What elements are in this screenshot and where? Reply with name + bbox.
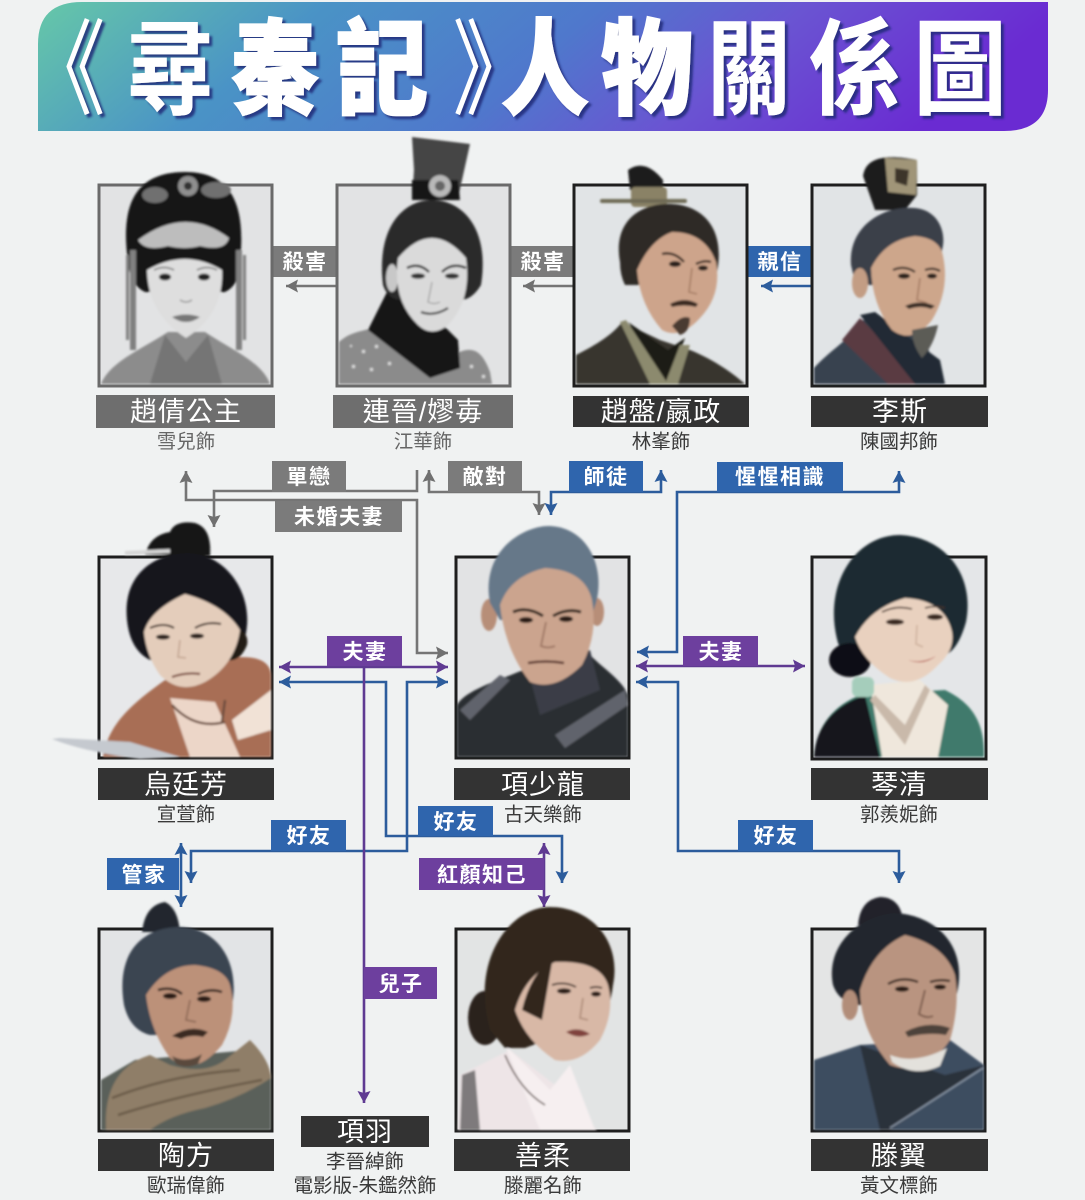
label: 師徒: 師徒 [584,466,628,489]
title text: 圖 [913,11,1007,128]
name bar: 陶方 [158,1141,214,1171]
portrait: 李斯 [814,157,945,384]
label: 紅顏知己: 紅顏知己 [437,864,527,887]
photo frame [456,929,629,1131]
name bar [573,396,749,427]
label: 好友 center: 好友 [434,811,478,834]
actor: 陳國邦飾 [860,431,938,453]
label: 惺惺相識: 惺惺相識 [735,466,825,489]
name bar: 琴清 [871,770,927,800]
portrait: 烏廷芳 [52,522,271,759]
title text: 《 [22,12,106,128]
name bar [333,395,513,428]
label: 好友 left: 好友 [286,825,332,848]
character: 項少龍 [454,526,630,826]
connector: 兒子 [363,666,365,1103]
photo frame [812,929,985,1131]
label: 夫妻 left: 夫妻 [342,641,388,664]
title text: 尋 [127,13,213,129]
actor: 雪兒飾 [157,431,215,453]
connector: 殺害 arrow to 連晉 [523,285,574,287]
connector: 好友 陶方 [191,682,448,883]
portrait: 滕翼 [814,897,985,1130]
photo frame [574,185,747,386]
name bar: 趙盤/嬴政 [601,397,721,427]
name bar [811,396,988,427]
name bar [98,768,274,800]
portrait: 連晉 [339,137,492,384]
name bar [301,1116,429,1147]
title banner [22,2,1048,131]
actor: 郭羨妮飾 [860,804,938,826]
title text: 》 [452,12,536,128]
name bar [454,768,630,800]
character: 趙倩公主 [96,172,275,453]
actor: 滕麗名飾 [504,1175,582,1197]
label: 好友 center [418,806,493,836]
label: 兒子 [364,967,437,999]
label: 好友 right: 好友 [754,825,798,848]
name bar [811,1139,988,1171]
connector: 未婚夫妻 [186,471,448,653]
connector: 紅顏知己 [543,843,545,907]
connector: 師徒 [551,470,661,515]
photo frame [812,185,985,386]
label: 好友 right [738,820,813,851]
label: 敵對: 敵對 [462,465,508,489]
label: 管家 [107,858,179,890]
title text: 係 [809,12,901,128]
label: 單戀 [272,461,346,492]
label: 敵對 [448,461,522,492]
connector: 好友 善柔 [279,682,562,883]
actor: 宣萱飾 [157,804,215,826]
connector: 殺害 arrow to 趙倩公主 [286,285,337,287]
connector: 好友 滕翼 [636,682,899,883]
name bar [454,1139,630,1171]
character: 陶方 [98,902,274,1197]
label: 管家: 管家 [122,863,166,887]
label: 殺害 right: 殺害 [520,250,566,274]
portrait: 琴清 [814,535,984,757]
label: 惺惺相識 [717,462,843,492]
title text [22,11,1007,129]
name bar [96,395,275,428]
label: 殺害 left: 殺害 [282,250,328,274]
name bar: 連晉/嫪毐 [363,397,483,427]
label: 未婚夫妻: 未婚夫妻 [294,506,384,529]
actor: 李晉綽飾 [326,1151,404,1173]
portrait: 趙倩公主 [101,172,270,384]
connector: 夫妻 right [636,665,805,667]
character: 烏廷芳 [52,522,274,826]
connector: 惺惺相識 [637,471,899,652]
name bar [811,768,988,800]
character: 滕翼 [811,897,988,1197]
actor: 古天樂飾 [504,804,582,826]
name bar: 項羽 [337,1117,393,1147]
title text: 記 [336,12,428,128]
connector: 管家 [180,843,182,907]
portrait: 趙盤 [576,166,745,384]
portrait: 善柔 [458,907,615,1130]
label: 親信 [748,246,812,277]
actor: 江華飾 [394,431,452,453]
connector: 夫妻 left [279,666,448,668]
character: 趙盤/嬴政 [573,166,749,453]
character: 項羽 [294,1116,436,1197]
actor: 歐瑞偉飾 [147,1175,225,1197]
label: 兒子: 兒子 [378,973,424,996]
label: 殺害 left [273,246,337,277]
title text: 關 [707,12,791,128]
title text: 秦 [231,13,319,129]
connector: 親信 arrow to 趙盤 [761,285,812,287]
label: 夫妻 right [683,636,758,666]
connector: 敵對 [429,470,539,515]
label: 師徒 [569,461,643,492]
name bar [98,1139,274,1171]
connector: 單戀 [214,470,417,527]
film actor: 電影版-朱鑑然飾 [294,1175,436,1197]
label: 紅顏知己 [419,858,544,890]
photo frame [456,557,629,758]
label: 夫妻 right: 夫妻 [698,641,744,664]
name bar: 趙倩公主 [130,397,242,427]
photo frame [337,185,510,386]
photo frame [812,557,986,759]
label: 親信: 親信 [758,251,802,274]
label: 好友 left [271,820,346,851]
portrait: 項少龍 [457,526,628,757]
label: 夫妻 left [327,636,402,666]
name bar: 善柔 [515,1141,571,1171]
character: 琴清 [811,535,988,826]
actor: 林峯飾 [632,431,690,453]
label: 殺害 right [511,246,574,277]
title text: 物 [601,12,693,128]
title text: 人 [501,13,589,129]
character: 善柔 [454,907,630,1197]
name bar: 烏廷芳 [144,770,228,800]
portrait: 陶方 [101,902,271,1130]
photo frame [99,929,272,1131]
photo frame [99,185,272,386]
photo frame [99,557,272,758]
actor: 黃文標飾 [860,1175,938,1197]
label: 單戀: 單戀 [286,466,332,489]
name bar: 滕翼 [871,1141,927,1171]
label: 未婚夫妻 [275,501,402,532]
name bar: 李斯 [872,397,928,427]
character: 李斯 [811,157,988,453]
character: 連晉/嫪毐 [333,137,513,453]
name bar: 項少龍 [501,770,585,800]
